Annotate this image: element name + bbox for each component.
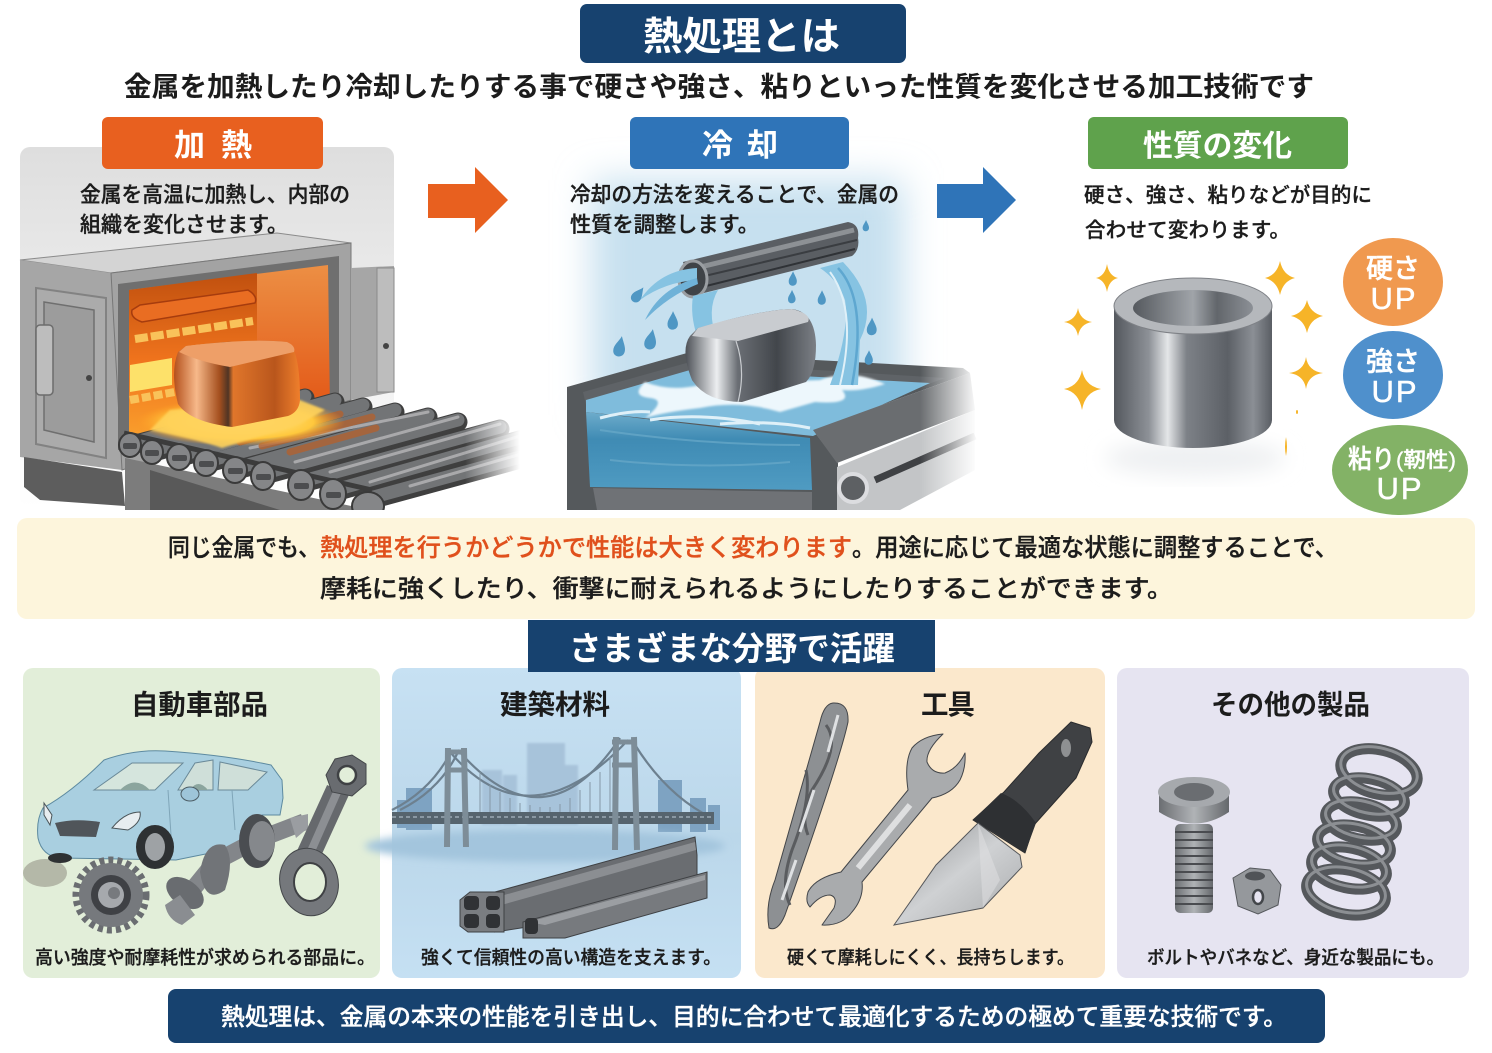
tools caption: 硬くて摩耗しにくく、長持ちします。 — [787, 947, 1074, 968]
subtitle: 金属を加熱したり冷却したりする事で硬さや強さ、粘りといった性質を変化させる加工技術です — [124, 71, 1314, 102]
tools heading: 工具 — [921, 689, 975, 720]
cooling description — [570, 183, 899, 237]
panel: automotive parts — [23, 668, 380, 978]
badge: strength up — [1343, 331, 1443, 419]
building heading: 建築材料 — [500, 689, 610, 720]
panel: cooling — [567, 117, 989, 515]
badge: hardness up: UP — [1370, 281, 1418, 316]
arrow: cooling to property change — [937, 167, 1016, 233]
illustration: water quench — [567, 220, 989, 515]
badge: hardness up — [1343, 238, 1443, 326]
water streams — [640, 262, 867, 385]
conclusion banner — [168, 989, 1325, 1043]
furnace heaters — [130, 290, 256, 400]
heating tab — [102, 117, 323, 169]
building caption: 強くて信頼性の高い構造を支えます。 — [421, 947, 721, 968]
callout: explanation: 。用途に応じて最適な状態に調整することで、 — [852, 534, 1338, 562]
splash — [639, 375, 885, 418]
icon: nut — [1233, 868, 1281, 914]
illustration: furnace — [20, 232, 518, 510]
icon: coil spring — [1302, 739, 1422, 922]
cooling tab: 冷 却 — [702, 128, 778, 163]
callout: explanation: 熱処理を行うかどうかで性能は大きく変わります — [320, 534, 852, 562]
heating description: 組織を変化させます。 — [80, 213, 288, 237]
icon: knife — [894, 722, 1092, 925]
icon: gear — [76, 860, 146, 930]
section heading — [528, 620, 935, 672]
sparkles — [1064, 261, 1323, 456]
callout: explanation: 同じ金属でも、 — [168, 534, 320, 562]
panel background: heating — [20, 147, 394, 507]
heating tab: 加 熱 — [174, 128, 252, 163]
droplets — [612, 220, 877, 365]
conclusion banner: 熱処理は、金属の本来の性能を引き出し、目的に合わせて最適化するための極めて重要な技術です。 — [221, 1004, 1287, 1031]
badge: toughness up: UP — [1376, 471, 1424, 506]
heating description — [80, 183, 350, 237]
title banner — [580, 4, 906, 63]
pipe — [683, 222, 858, 296]
other caption: ボルトやバネなど、身近な製品にも。 — [1147, 947, 1444, 968]
icon: bolt — [1158, 777, 1230, 913]
callout: explanation: 摩耗に強くしたり、衝撃に耐えられるようにしたりすることができます。 — [320, 575, 1173, 603]
badge: strength up: UP — [1371, 374, 1419, 409]
icon: connecting rod — [272, 755, 366, 922]
badge: strength up: 強さ — [1366, 347, 1420, 377]
title banner: 熱処理とは — [643, 16, 840, 59]
arrow: heating to cooling — [428, 167, 508, 233]
callout: explanation — [17, 518, 1475, 619]
badge: hardness up: 硬さ — [1366, 254, 1420, 284]
panel: other products — [1117, 668, 1469, 978]
badge: toughness up: (靭性) — [1396, 449, 1456, 472]
illustration: steel beams — [460, 837, 707, 938]
conveyor fade — [468, 420, 520, 483]
panel: property change — [1064, 117, 1468, 515]
icon: drill bit — [768, 703, 848, 929]
property description — [1084, 184, 1372, 242]
illustration: car — [23, 751, 283, 887]
heating description: 金属を高温に加熱し、内部の — [80, 183, 350, 207]
badge: toughness up: 粘り — [1348, 444, 1395, 474]
automotive caption: 高い強度や耐摩耗性が求められる部品に。 — [35, 947, 375, 968]
illustration: bridge and skyline — [365, 737, 725, 862]
icon: wrench — [807, 734, 965, 925]
illustration: steel cylinder — [1105, 278, 1285, 476]
conveyor rollers — [132, 396, 535, 500]
panel background: cooling — [592, 180, 904, 415]
cooling description: 冷却の方法を変えることで、金属の — [570, 183, 899, 207]
property description: 硬さ、強さ、粘りなどが目的に — [1084, 184, 1372, 207]
panel: heating — [20, 117, 518, 510]
quenched metal block — [685, 309, 816, 402]
cooling tab — [630, 117, 849, 169]
badge: toughness up — [1332, 425, 1468, 515]
cooling description: 性質を調整します。 — [570, 213, 759, 237]
icon: crankshaft — [160, 814, 308, 925]
automotive heading: 自動車部品 — [131, 689, 268, 720]
property tab: 性質の変化 — [1143, 130, 1292, 163]
property tab — [1088, 117, 1348, 169]
other heading: その他の製品 — [1211, 689, 1370, 720]
hot metal glow — [146, 406, 343, 446]
hot metal block — [174, 341, 300, 427]
panel: building materials — [365, 668, 741, 978]
tank — [567, 353, 970, 510]
panel: tools — [755, 668, 1105, 978]
conveyor frame — [125, 458, 370, 510]
section heading: さまざまな分野で活躍 — [569, 630, 895, 667]
property description: 合わせて変わります。 — [1085, 219, 1290, 242]
roller ends — [119, 433, 384, 520]
